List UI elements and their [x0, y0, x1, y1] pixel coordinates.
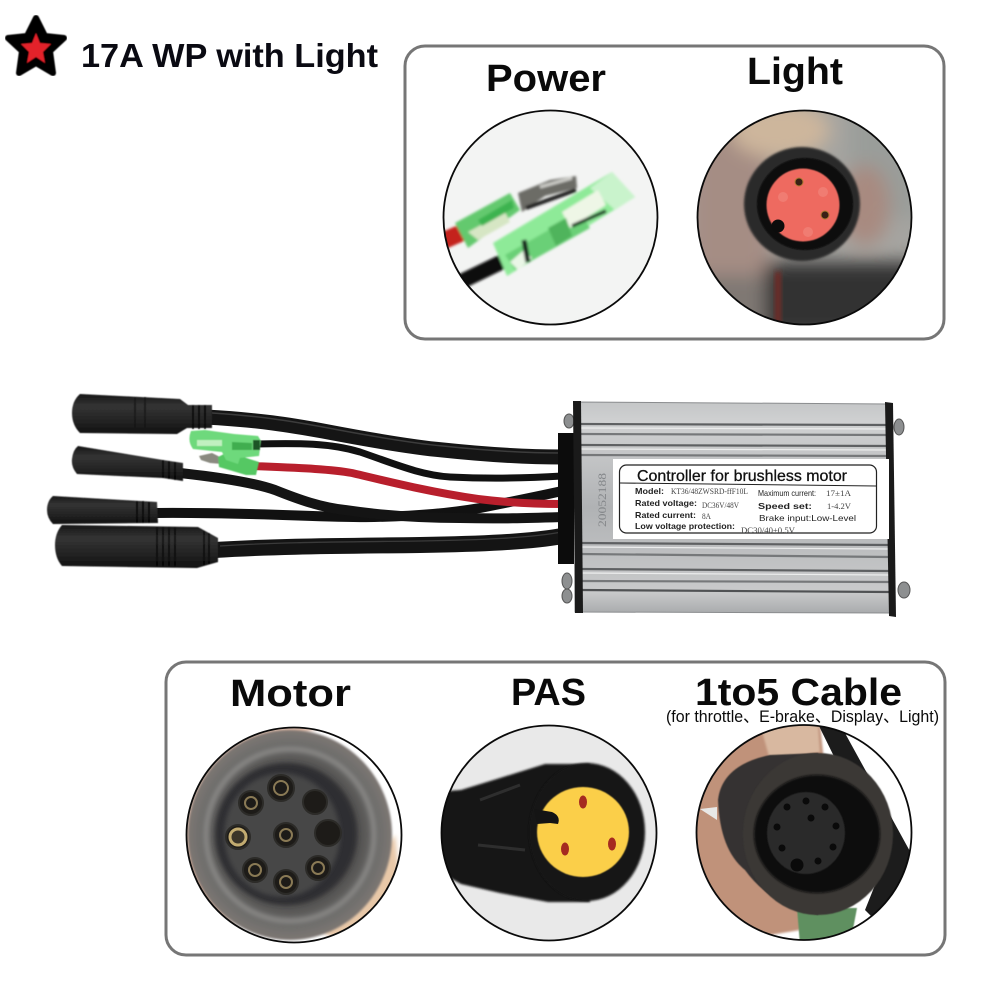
caption: cable uses: (for throttle、E-brake、Display、Light): [666, 707, 939, 726]
cable: lower crossing wire: [155, 491, 562, 517]
serial number: 20052188: [595, 473, 609, 527]
heading: PAS: PAS: [511, 672, 586, 714]
product label: Model:: [635, 486, 664, 496]
product label: DC30/40±0.5V: [741, 526, 795, 535]
product label: Low voltage protection:: [635, 521, 735, 531]
product label: Speed set:: [758, 501, 812, 511]
heading: 1to5 Cable: 1to5 Cable: [695, 672, 902, 714]
product label: Rated voltage:: [635, 498, 697, 508]
cable grommet: [558, 433, 574, 564]
cable: bottom thick: [214, 536, 562, 550]
product label: Brake input:Low-Level: [759, 513, 856, 523]
heading: Power: Power: [486, 58, 606, 100]
panel: motor, PAS and 1to5 cable connectors: [166, 662, 945, 955]
connector: second plug: [72, 446, 183, 481]
cable: thin black to terminal: [255, 444, 562, 478]
end caps: [573, 401, 583, 613]
cable: connector two wire: [180, 473, 562, 518]
product label: 17±1A: [826, 489, 851, 498]
product label: [613, 459, 889, 539]
cable: red wire: [252, 466, 562, 504]
icon: black star with red centre: [8, 18, 64, 73]
photo circle: light connector: [696, 110, 912, 326]
heading: Light: Light: [747, 51, 843, 93]
title: 17A WP with Light: [81, 37, 378, 74]
panel: power and light connectors: [405, 46, 944, 339]
photo circle: power terminals: [436, 108, 662, 330]
connector: top plug: [72, 394, 212, 434]
product photo: cables and connectors: [47, 394, 910, 617]
connector: third plug: [47, 496, 158, 524]
mounting bolts: [562, 414, 910, 603]
controller body: [558, 401, 910, 617]
photo circle: 1to5 cable connector: [694, 724, 914, 945]
cable: upper thick: [205, 417, 562, 457]
product label: DC36V/48V: [702, 501, 739, 510]
product label: Rated current:: [635, 510, 696, 520]
product label: Maximum current:: [758, 488, 816, 498]
product label: Controller for brushless motor: [637, 468, 848, 485]
product label: 1-4.2V: [827, 502, 851, 511]
heading: Motor: Motor: [230, 673, 351, 715]
green terminals: [189, 430, 261, 475]
aluminium case: [575, 402, 895, 613]
photo circle: PAS connector: [436, 724, 660, 944]
product label: KT36/48ZWSRD-ffF10L: [671, 487, 748, 496]
product label: 8A: [702, 512, 711, 521]
photo circle: motor connector: [186, 727, 402, 943]
connector: bottom plug: [55, 525, 218, 568]
